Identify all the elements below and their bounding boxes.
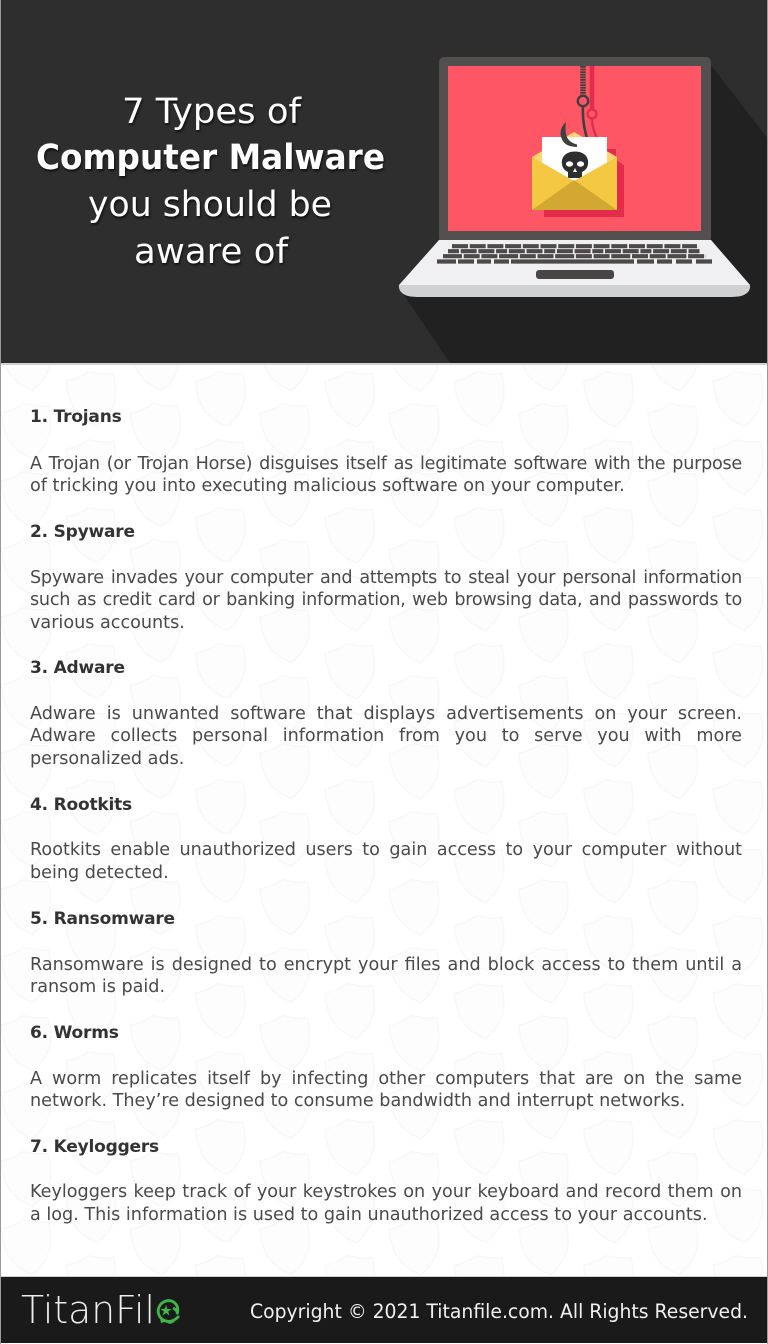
description (30, 1069, 742, 1111)
hook barb (560, 122, 577, 147)
section 7: Keyloggers (30, 1137, 742, 1225)
heading: 5. Ransomware (30, 909, 175, 929)
skull (562, 152, 588, 178)
description: A Trojan (or Trojan Horse) disguises itself as legitimate software with the purpose (30, 454, 742, 474)
envelope shadow (544, 149, 624, 217)
heading: 1. Trojans (30, 407, 122, 427)
logo: TitanFile: TitanFil (21, 1288, 155, 1332)
description: of tricking you into executing malicious software on your computer. (30, 476, 625, 496)
trackpad (536, 270, 614, 279)
title: 7 Types of (122, 92, 302, 132)
heading: 4. Rootkits (30, 795, 132, 815)
description: Adware collects personal information from you to serve you with more (30, 726, 742, 746)
description (30, 840, 742, 883)
description: various accounts. (30, 613, 185, 633)
description: Adware is unwanted software that displays advertisements on your screen. (30, 704, 742, 724)
title (36, 92, 385, 272)
envelope back flap (532, 132, 617, 185)
description (30, 1182, 742, 1225)
description: ransom is paid. (30, 977, 165, 997)
heading: 2. Spyware (30, 522, 135, 542)
header panel (0, 0, 768, 365)
logo mark: green spiral with star (158, 1301, 179, 1324)
laptop long shadow (399, 65, 768, 363)
description (30, 704, 742, 769)
section 3: Adware (30, 658, 742, 769)
description (30, 454, 742, 496)
description (30, 955, 742, 997)
footer bar (0, 1276, 768, 1343)
description: personalized ads. (30, 749, 184, 769)
description: network. They’re designed to consume bandwidth and interrupt networks. (30, 1091, 685, 1111)
description: Spyware invades your computer and attempts to steal your personal information (30, 568, 742, 588)
section 6: Worms (30, 1023, 742, 1111)
copyright: Copyright © 2021 Titanfile.com. All Rights Reserved. (250, 1300, 748, 1323)
red hook shadow (588, 66, 597, 138)
description: Rootkits enable unauthorized users to gain access to your computer without (30, 840, 742, 860)
description: Keyloggers keep track of your keystrokes on your keyboard and record them on (30, 1182, 742, 1202)
description (30, 568, 742, 633)
title: Computer Malware (36, 138, 385, 178)
fishing line (578, 66, 588, 138)
description: Ransomware is designed to encrypt your files and block access to them until a (30, 955, 742, 975)
heading: 3. Adware (30, 658, 125, 678)
section 1: Trojans (30, 407, 742, 496)
section 2: Spyware (30, 522, 742, 633)
description: a log. This information is used to gain unauthorized access to your accounts. (30, 1205, 708, 1225)
laptop lid (439, 57, 711, 243)
title: aware of (134, 232, 289, 272)
envelope front (532, 157, 617, 210)
keyboard (437, 246, 712, 262)
title: you should be (88, 185, 332, 225)
description: such as credit card or banking information, web browsing data, and passwords to (30, 590, 742, 610)
letter (542, 137, 607, 190)
section 4: Rootkits (30, 795, 742, 883)
section 5: Ransomware (30, 909, 742, 997)
background: shield pattern (0, 365, 768, 1277)
heading: 6. Worms (30, 1023, 119, 1043)
heading: 7. Keyloggers (30, 1137, 159, 1157)
laptop screen (448, 66, 701, 231)
icon: laptop with phishing email (399, 57, 750, 297)
envelope bottom flap (532, 180, 617, 210)
description: being detected. (30, 863, 169, 883)
description: A worm replicates itself by infecting other computers that are on the same (30, 1069, 742, 1089)
laptop base (399, 240, 750, 297)
